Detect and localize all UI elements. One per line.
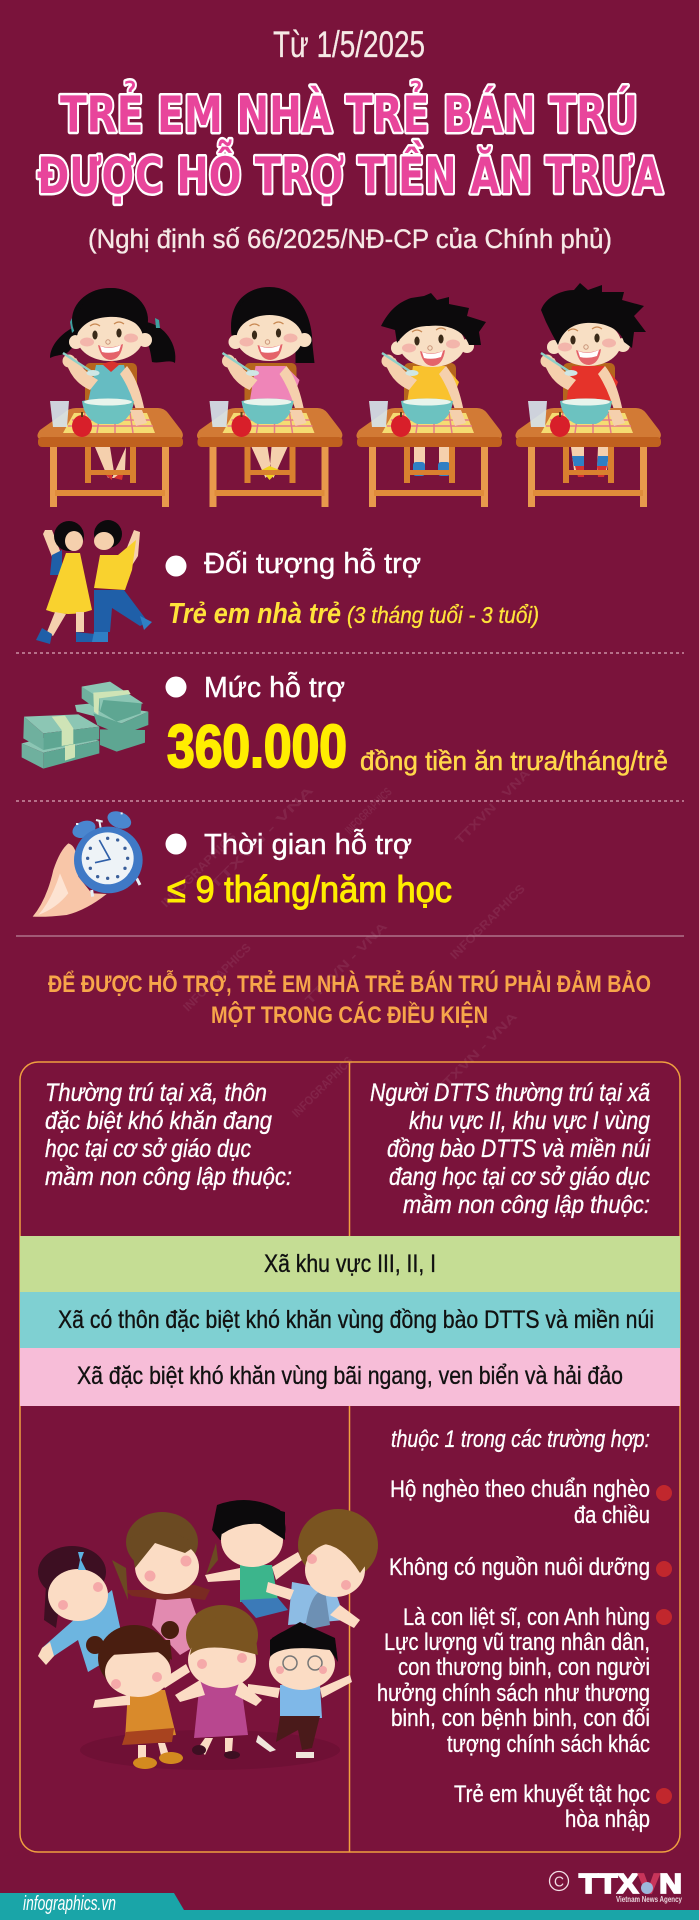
band: pink: [20, 1348, 680, 1406]
text: right column condition: đang học tại cơ sở giáo dục: [389, 1163, 650, 1191]
band: green: [20, 1236, 680, 1292]
logo: TTXVN: TTXVN: [579, 1868, 682, 1899]
icon: money stacks: [22, 682, 148, 769]
heading: conditions: MỘT TRONG CÁC ĐIỀU KIỆN: [211, 1001, 488, 1029]
section: support target: Đối tượng hỗ trợ: [204, 547, 421, 580]
right stack: [75, 682, 148, 752]
watermarks: TTXVN - VNA: [302, 919, 390, 1007]
watermarks: [158, 766, 533, 1120]
illustration: boy 1 eating at desk: [356, 293, 502, 507]
icon: hand holding alarm clock: [33, 808, 143, 917]
text: left column condition: Thường trú tại xã, thôn: [45, 1079, 267, 1107]
title: [37, 80, 663, 205]
watermarks: INFOGRAPHICS: [158, 830, 239, 910]
watermarks: TTXVN - VNA: [432, 1009, 520, 1097]
list: cases: Không có nguồn nuôi dưỡng: [389, 1554, 650, 1581]
list: cases: Lực lượng vũ trang nhân dân,: [384, 1629, 650, 1656]
list: cases: binh, con bệnh binh, con đối: [391, 1705, 650, 1732]
text: right column condition: [370, 1079, 651, 1219]
list: cases: Hộ nghèo theo chuẩn nghèo: [390, 1476, 650, 1503]
watermarks: INFOGRAPHICS: [447, 882, 528, 962]
text: left column condition: mầm non công lập thuộc:: [45, 1163, 292, 1191]
illustration: girl 2 eating at desk: [197, 287, 342, 507]
girl with buns in orange: [86, 1621, 190, 1769]
watermarks: INFOGRAPHICS: [289, 1054, 356, 1120]
section: support amount: [166, 671, 668, 780]
text: left column condition: [45, 1079, 292, 1191]
section: support duration: Thời gian hỗ trợ: [204, 828, 412, 861]
band: green: Xã khu vực III, II, I: [264, 1250, 436, 1278]
logo: TTXVN: [550, 1868, 682, 1904]
boy in green: [205, 1500, 302, 1618]
left stack: [22, 714, 99, 769]
list: cases: hòa nhập: [565, 1806, 650, 1833]
boy with overalls: [266, 1509, 378, 1630]
brown-haired girl in magenta: [175, 1605, 262, 1759]
text: left column condition: học tại cơ sở giáo dục: [45, 1135, 251, 1163]
text: right column condition: mầm non công lập thuộc:: [403, 1191, 650, 1219]
text: left column condition: đặc biệt khó khăn đang: [45, 1107, 272, 1135]
list: cases: con thương binh, con người: [398, 1654, 650, 1681]
list: cases: Trẻ em khuyết tật học: [454, 1781, 650, 1808]
text: right column condition: đồng bào DTTS và miền núi: [387, 1135, 651, 1163]
text: right column condition: khu vực II, khu vực I vùng: [409, 1107, 650, 1135]
illustration: girl 1 eating at desk: [37, 288, 183, 507]
footer band: [0, 1893, 699, 1920]
date line: Từ 1/5/2025: [273, 24, 425, 65]
list: cases: hưởng chính sách như thương: [377, 1680, 650, 1707]
panel: conditions table: [20, 1062, 680, 1852]
girl with bow: [38, 1546, 125, 1672]
section: support target: Trẻ em nhà trẻ: [168, 598, 341, 630]
logo: TTXVN: Vietnam News Agency: [616, 1895, 682, 1904]
section: support amount: 360.000: [167, 713, 347, 780]
boy with glasses: [248, 1622, 352, 1758]
section: support amount: đồng tiền ăn trưa/tháng/trẻ: [360, 746, 668, 776]
list: cases: tượng chính sách khác: [447, 1731, 650, 1758]
band: teal: [20, 1292, 680, 1348]
heading: conditions: [48, 969, 651, 1029]
watermarks: TTXVN - VNA: [452, 766, 533, 847]
brown-haired girl in pink: [112, 1512, 218, 1655]
watermarks: INFOGRAPHICS: [342, 785, 395, 837]
section: support duration: [166, 828, 452, 910]
section: support target: [166, 547, 539, 630]
icon: two children dancing: [36, 520, 152, 644]
list: cases: [377, 1476, 650, 1833]
section: support duration: ≤ 9 tháng/năm học: [167, 869, 452, 910]
subtitle: (Nghị định số 66/2025/NĐ-CP của Chính phủ): [88, 224, 612, 254]
list: cases: Là con liệt sĩ, con Anh hùng: [403, 1604, 650, 1631]
footer band: infographics.vn: [23, 1893, 116, 1915]
list: cases: đa chiều: [574, 1502, 650, 1529]
text: right column condition: Người DTTS thường trú tại xã: [370, 1079, 650, 1107]
logo: TTXVN: C: [554, 1874, 564, 1890]
list bullets: [656, 1485, 672, 1804]
illustration: boy 2 eating at desk: [515, 283, 661, 507]
illustration: group of seven children: [38, 1500, 378, 1770]
text: case intro: thuộc 1 trong các trường hợp:: [391, 1426, 650, 1453]
watermarks: TTXVN - VNA: [207, 783, 317, 892]
section: support target: (3 tháng tuổi - 3 tuổi): [347, 602, 539, 628]
section: support amount: Mức hỗ trợ: [204, 671, 345, 704]
watermarks: INFOGRAPHICS: [180, 941, 254, 1014]
